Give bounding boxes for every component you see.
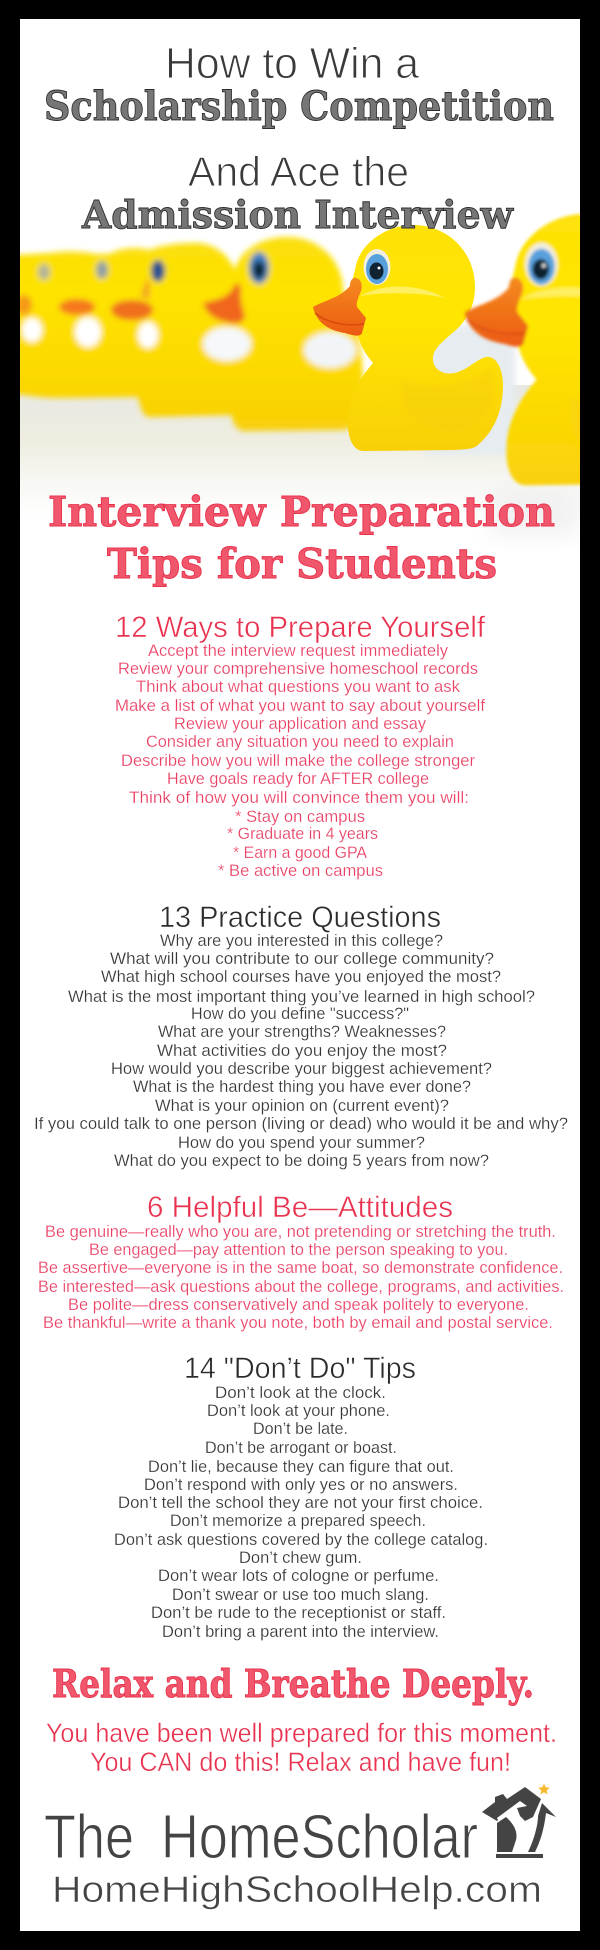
list: questions: What is your opinion on (current event)? [155, 1097, 449, 1115]
closing message: You CAN do this! Relax and have fun! [90, 1747, 511, 1777]
heading: 13 practice questions: 13 Practice Questions [159, 901, 441, 934]
list: don't do tips: Don’t respond with only yes or no answers. [144, 1476, 458, 1494]
list: attitudes: Be thankful—write a thank you note, both by email and postal service. [43, 1314, 553, 1332]
list: preparation steps: Accept the interview request immediately [148, 642, 449, 660]
list: preparation steps: * Graduate in 4 years [227, 825, 378, 843]
list: questions: If you could talk to one person (living or dead) who would it be and why? [34, 1115, 568, 1133]
list: preparation steps: Review your comprehensive homeschool records [118, 660, 478, 678]
backdrop behind tail [425, 325, 515, 455]
list: don't do tips: Don’t memorize a prepared speech. [170, 1512, 426, 1530]
list: attitudes: Be genuine—really who you are, not pretending or stretching the truth. [45, 1223, 556, 1241]
duck right edge [463, 212, 580, 488]
website url: HomeHighSchoolHelp.com [52, 1869, 542, 1910]
panel: 12 ways to prepare [115, 611, 486, 880]
panel: 6 helpful be-attitudes [38, 1191, 564, 1332]
list: don't do tips [114, 1384, 488, 1641]
closing message [46, 1718, 557, 1777]
list: questions: What is the most important thing you’ve learned in high school? [68, 988, 535, 1006]
list: don't do tips: Don’t wear lots of cologne or perfume. [158, 1567, 439, 1585]
list: don't do tips: Don’t tell the school they are not your first choice. [118, 1494, 483, 1512]
photo: row of rubber ducks [0, 214, 600, 535]
list: preparation steps: Have goals ready for AFTER college [167, 770, 429, 788]
list: questions: Why are you interested in this college? [160, 932, 443, 950]
list: don't do tips: Don’t lie, because they can figure that out. [148, 1458, 454, 1476]
list: preparation steps: * Stay on campus [235, 808, 365, 826]
photo floor shading [20, 385, 533, 492]
callout: relax and breathe deeply: Relax and Breathe Deeply. [52, 1661, 534, 1706]
list: attitudes: Be polite—dress conservatively and speak politely to everyone. [68, 1296, 529, 1314]
logo wordmark: the homescholar: HomeScholar [161, 1803, 478, 1872]
logo wordmark: the homescholar [44, 1803, 478, 1872]
list: attitudes: Be interested—ask questions about the college, programs, and activities. [38, 1278, 564, 1296]
list: preparation steps: Consider any situation you need to explain [146, 733, 454, 751]
list: don't do tips: Don’t be late. [253, 1420, 348, 1438]
list: attitudes: Be assertive—everyone is in the same boat, so demonstrate confidence. [38, 1259, 563, 1277]
list: questions: What do you expect to be doing 5 years from now? [114, 1152, 489, 1170]
list: preparation steps [115, 642, 485, 880]
list: don't do tips: Don’t look at your phone. [207, 1402, 390, 1420]
duck in focus [313, 225, 503, 451]
blurred ducks: merged row [0, 237, 365, 431]
heading: 6 helpful be-attitudes: 6 Helpful Be—Attitudes [147, 1191, 453, 1224]
heading: 14 don't do tips: 14 "Don’t Do" Tips [184, 1352, 416, 1385]
panel: 14 don't do tips [114, 1352, 488, 1641]
list: don't do tips: Don’t be arrogant or boast. [205, 1439, 397, 1457]
list: questions: What are your strengths? Weaknesses? [158, 1023, 446, 1041]
list: don't do tips: Don’t ask questions covered by the college catalog. [114, 1531, 488, 1549]
list: don't do tips: Don’t be rude to the receptionist or staff. [151, 1604, 446, 1622]
list: questions: How do you spend your summer? [178, 1134, 425, 1152]
list: preparation steps: Think about what questions you want to ask [136, 678, 461, 696]
floor shading on the right [494, 495, 576, 532]
list: questions: What high school courses have you enjoyed the most? [101, 968, 501, 986]
list: don't do tips: Don’t bring a parent into the interview. [162, 1623, 439, 1641]
list: don't do tips: Don’t look at the clock. [215, 1384, 386, 1402]
icon: house logo with star [482, 1784, 556, 1858]
list: questions: What will you contribute to our college community? [110, 950, 494, 968]
title line: scholarship competition: Scholarship Competition [44, 83, 554, 130]
list: attitudes: Be engaged—pay attention to the person speaking to you. [89, 1241, 508, 1259]
logo wordmark: the homescholar: The [44, 1803, 134, 1872]
list: preparation steps: Review your application and essay [174, 715, 427, 733]
title [44, 39, 554, 237]
list: preparation steps: * Be active on campus [218, 862, 383, 880]
list: don't do tips: Don’t swear or use too much slang. [172, 1586, 429, 1604]
list: preparation steps: Make a list of what you want to say about yourself [115, 697, 485, 715]
subtitle line 2: Tips for Students [107, 540, 497, 588]
subtitle [48, 488, 555, 588]
subtitle line 1: Interview Preparation [48, 488, 555, 536]
list: attitudes [38, 1223, 564, 1332]
list: questions: What is the hardest thing you have ever done? [133, 1078, 471, 1096]
list: questions: What activities do you enjoy the most? [157, 1042, 447, 1060]
list: preparation steps: * Earn a good GPA [233, 844, 367, 862]
list: questions: How would you describe your biggest achievement? [111, 1060, 492, 1078]
list: preparation steps: Think of how you will convince them you will: [129, 789, 469, 807]
panel: 13 practice questions [34, 901, 568, 1170]
list: questions [34, 932, 568, 1170]
list: don't do tips: Don’t chew gum. [239, 1549, 362, 1567]
closing message: You have been well prepared for this moment. [46, 1718, 557, 1748]
heading: 12 ways: 12 Ways to Prepare Yourself [115, 611, 486, 644]
list: questions: How do you define "success?" [191, 1005, 409, 1023]
title line: admission interview: Admission Interview [81, 192, 514, 237]
title line: and ace the: And Ace the [188, 148, 409, 195]
list: preparation steps: Describe how you will make the college stronger [121, 752, 475, 770]
title line: how to win: How to Win a [165, 39, 420, 88]
